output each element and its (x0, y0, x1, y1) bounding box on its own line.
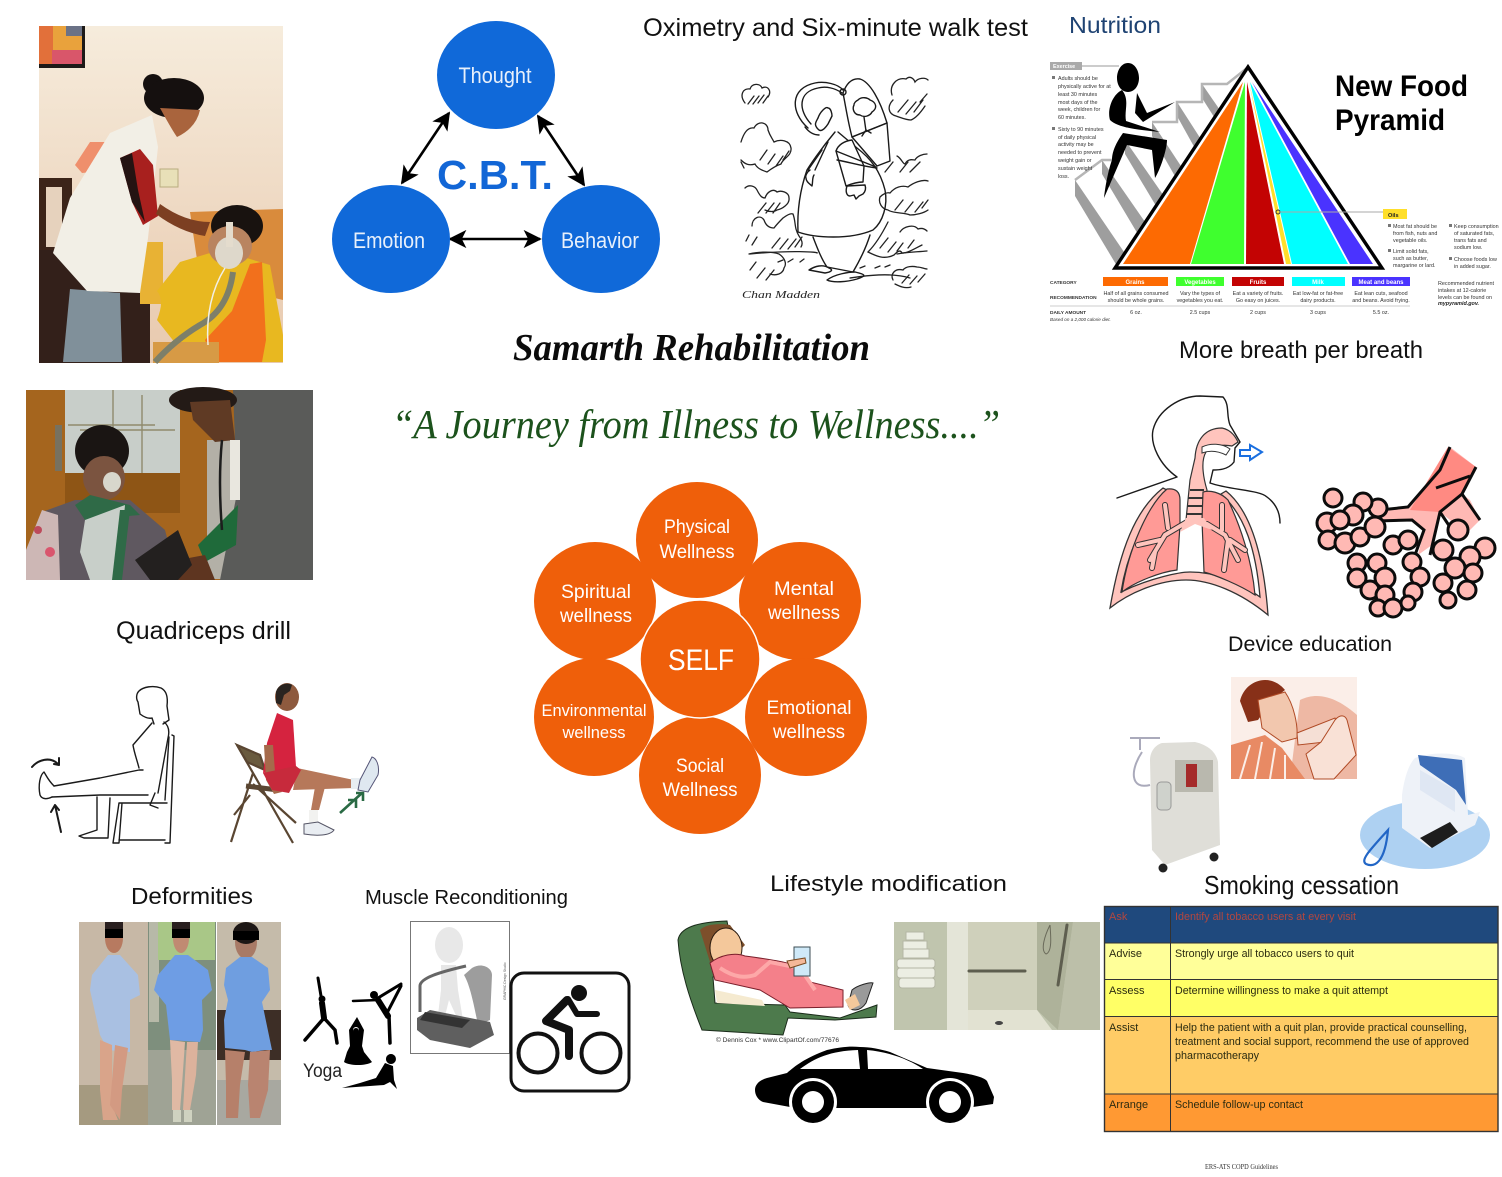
photo: accessible shower (894, 922, 1100, 1030)
legend table: 3 cups (1310, 310, 1326, 316)
photo: three patients with leg deformities (79, 922, 281, 1125)
heading: lifestyle modification: Lifestyle modification (770, 871, 1007, 896)
clouds (741, 77, 928, 288)
petal: emotional wellness: wellness (772, 722, 845, 743)
petal: physical wellness (636, 482, 758, 598)
icon: figure on treadmill: GRAPHIC Design Studio (503, 962, 507, 1000)
circle: emotion (332, 185, 450, 293)
airway (1186, 428, 1238, 520)
patient 1 (90, 922, 140, 1120)
oils note: Limit solid fats, (1393, 249, 1429, 255)
exercise note: Exercise (1053, 64, 1075, 70)
legend table: Based on a 2,000 calorie diet. (1050, 317, 1111, 322)
row: assist: Help the patient with a quit plan, provide practical counselling, (1175, 1022, 1467, 1034)
source note: ERS-ATS COPD Guidelines (1205, 1163, 1278, 1171)
warrior pose (305, 978, 337, 1043)
legend table: Meat and beans (1358, 280, 1404, 286)
oils note: from fish, nuts and (1393, 231, 1437, 237)
oils note: of saturated fats, (1454, 231, 1495, 237)
centre: self (640, 600, 760, 718)
chart: new food pyramid (1050, 62, 1499, 322)
petal: social wellness: Wellness (662, 780, 738, 801)
dancer pose (353, 984, 401, 1043)
illustration: man carrying tree oxygen pack (741, 77, 928, 301)
exercise note: loss. (1058, 174, 1069, 180)
row: arrange (1104, 1094, 1498, 1131)
petal: environmental wellness: wellness (562, 723, 626, 742)
petal: emotional wellness (745, 658, 867, 776)
arrows between CBT circles (402, 113, 584, 239)
heading: nutrition: Nutrition (1069, 12, 1161, 38)
row: ask: Identify all tobacco users at every visit (1175, 911, 1356, 923)
figure (795, 79, 890, 282)
legend table: Eat lean cuts, seafood (1354, 291, 1408, 297)
photo: doctor checking patient with oxygen mask (26, 387, 313, 580)
row: advise: Strongly urge all tobacco users to quit (1175, 948, 1354, 960)
legend table: CATEGORY (1050, 280, 1077, 286)
lung left (1122, 489, 1180, 592)
pleura outer (1110, 488, 1268, 615)
device: man using inhaler spacer (1231, 677, 1357, 779)
legend table: Grains (1125, 280, 1145, 286)
petal: spiritual wellness (534, 542, 656, 660)
signature: Chan Madden (742, 289, 821, 301)
icons: yoga silhouettes (303, 978, 401, 1089)
oils note: margarine or lard. (1393, 263, 1436, 269)
row: assist: treatment and social support, recommend the use of approved (1175, 1036, 1469, 1048)
exercise note: activity may be (1058, 142, 1094, 148)
title: Samarth Rehabilitation: Samarth Rehabilitation (513, 327, 870, 369)
legend table: DAILY AMOUNT (1050, 310, 1086, 316)
pyramid (1115, 67, 1382, 268)
legend table: 6 oz. (1130, 310, 1142, 316)
legend table (1050, 277, 1495, 322)
row: assess (1104, 980, 1498, 1016)
panel: CBT triangle (332, 21, 660, 293)
exercise note: needed to prevent (1058, 150, 1102, 156)
oils note: in added sugar. (1454, 264, 1491, 270)
row: assist (1104, 1016, 1498, 1094)
patient 2 (154, 922, 212, 1122)
heading: oximetry: Oximetry and Six-minute walk test (643, 14, 1028, 42)
circle: emotion: Emotion (353, 228, 425, 253)
circle: behavior: Behavior (561, 228, 639, 253)
legend table: 5.5 oz. (1373, 310, 1389, 316)
oils note: Choose foods low (1454, 257, 1497, 263)
oils note: such as butter, (1393, 256, 1429, 262)
legend table: and beans. Avoid frying. (1352, 298, 1410, 304)
exercise note: weight gain or (1057, 158, 1092, 164)
petal: mental wellness (739, 542, 861, 660)
legend table: RECOMMENDATION (1050, 295, 1097, 301)
alveoli tree (1317, 447, 1495, 617)
person (263, 683, 379, 835)
centre: self: SELF (668, 644, 734, 677)
illustration: man doing leg extension on folding chair (231, 683, 379, 843)
patient 3 (224, 922, 272, 1118)
circle: thought: Thought (458, 63, 532, 88)
photo: nurse fitting mask on patient (39, 26, 283, 363)
exercise note: physically active for at (1058, 84, 1111, 90)
petal: social wellness: Social (676, 756, 724, 777)
legend table: 2 cups (1250, 310, 1266, 316)
petal: physical wellness: Wellness (660, 542, 734, 563)
legend table: Vary the types of (1180, 291, 1221, 297)
row: ask (1104, 906, 1498, 943)
label: C.B.T.: C.B.T. (437, 152, 553, 198)
head outline (1117, 396, 1280, 523)
row: arrange: Arrange (1109, 1099, 1148, 1111)
legend table: Half of all grains consumed (1103, 291, 1169, 297)
illustration: woman resting in recliner (678, 921, 877, 1044)
heading: more breath: More breath per breath (1179, 337, 1423, 364)
exercise note: Adults should be (1058, 76, 1098, 82)
legend table: intakes at 12-calorie (1438, 288, 1486, 294)
petal: physical wellness: Physical (664, 517, 730, 538)
exercise note: most days of the (1058, 100, 1098, 106)
legend table: Fruits (1250, 280, 1267, 286)
petal: spiritual wellness: Spiritual (561, 582, 631, 603)
illustration: seated knee extension line drawing (32, 687, 174, 843)
exercise note (1050, 62, 1119, 180)
petal: social wellness (639, 716, 761, 834)
legend table: 2.5 cups (1190, 310, 1210, 316)
panel: wellness flower (534, 482, 867, 834)
circle: behavior (542, 185, 660, 293)
oils note: Most fat should be (1393, 224, 1437, 230)
heading: quadriceps drill: Quadriceps drill (116, 617, 291, 645)
exercise note: least 30 minutes (1058, 92, 1098, 98)
lung right (1202, 491, 1255, 595)
exercise note: 60 minutes. (1058, 115, 1086, 121)
legend table: Eat a variety of fruits. (1233, 291, 1283, 297)
heading: muscle reconditioning: Muscle Reconditioning (365, 887, 568, 909)
subtitle: journey quote: “A Journey from Illness to Wellness....” (392, 401, 1000, 447)
row: advise: Advise (1109, 948, 1142, 960)
petal: mental wellness: wellness (767, 603, 840, 624)
row: assess: Assess (1109, 985, 1145, 997)
illustration: woman resting in recliner: © Dennis Cox * www.ClipartOf.com/77676 (716, 1037, 840, 1044)
legend table: should be whole grains. (1108, 298, 1164, 304)
exercise note: week, children for (1057, 107, 1100, 113)
legend table: vegetables you eat. (1177, 298, 1223, 304)
legend table: Milk (1312, 280, 1324, 286)
icon: car (755, 1047, 994, 1126)
exercise note: Sixty to 90 minutes (1058, 127, 1104, 133)
oils note: vegetable oils. (1393, 238, 1427, 244)
heading: smoking cessation: Smoking cessation (1204, 870, 1399, 900)
row: assist: Assist (1109, 1022, 1138, 1034)
oils note (1276, 209, 1499, 270)
oils note: Keep consumption (1454, 224, 1499, 230)
exercise note: of daily physical (1058, 135, 1096, 141)
icon: cyclist (511, 973, 629, 1091)
row: arrange: Schedule follow-up contact (1175, 1099, 1303, 1111)
circle: thought (437, 21, 555, 129)
row: assess: Determine willingness to make a quit attempt (1175, 985, 1388, 997)
petal: environmental wellness (534, 658, 654, 776)
exhale arrow (1240, 445, 1262, 460)
table: smoking cessation 5 As (1104, 906, 1498, 1132)
row: advise (1104, 943, 1498, 980)
legend table: mypyramid.gov. (1438, 301, 1480, 307)
legend table: levels can be found on (1438, 295, 1492, 301)
lotus pose (344, 1017, 372, 1065)
runner figure (1104, 63, 1175, 198)
heading: device education: Device education (1228, 633, 1392, 656)
stairs (1075, 68, 1247, 266)
label: yoga: Yoga (303, 1061, 342, 1082)
device: oxygen concentrator (1130, 738, 1220, 872)
cobra pose (342, 1054, 397, 1089)
row: ask: Ask (1109, 911, 1128, 923)
illustration: lungs and airway (1110, 396, 1495, 617)
petal: mental wellness: Mental (774, 579, 834, 600)
legend table: dairy products. (1300, 298, 1336, 304)
folding chair (231, 745, 296, 843)
petal: spiritual wellness: wellness (559, 606, 632, 627)
legend table: Go easy on juices. (1236, 298, 1280, 304)
title: new food pyramid: New Food (1335, 70, 1468, 103)
legend table: Vegetables (1184, 280, 1216, 286)
oils note: Oils (1388, 213, 1399, 219)
title: new food pyramid (1335, 70, 1468, 137)
oils note: sodium low. (1454, 245, 1482, 251)
petal: environmental wellness: Environmental (542, 701, 646, 720)
oils note: trans fats and (1454, 238, 1487, 244)
title: new food pyramid: Pyramid (1335, 104, 1445, 137)
heading: deformities: Deformities (131, 883, 253, 909)
device: nebulizer (1360, 754, 1490, 869)
legend table: Recommended nutrient (1438, 281, 1495, 287)
legend table: Eat low-fat or fat-free (1293, 291, 1343, 297)
row: assist: pharmacotherapy (1175, 1050, 1259, 1062)
bronchi (1138, 505, 1245, 570)
icon: figure on treadmill (410, 922, 510, 1054)
exercise note: sustain weight (1058, 166, 1093, 172)
petal: emotional wellness: Emotional (766, 698, 852, 719)
